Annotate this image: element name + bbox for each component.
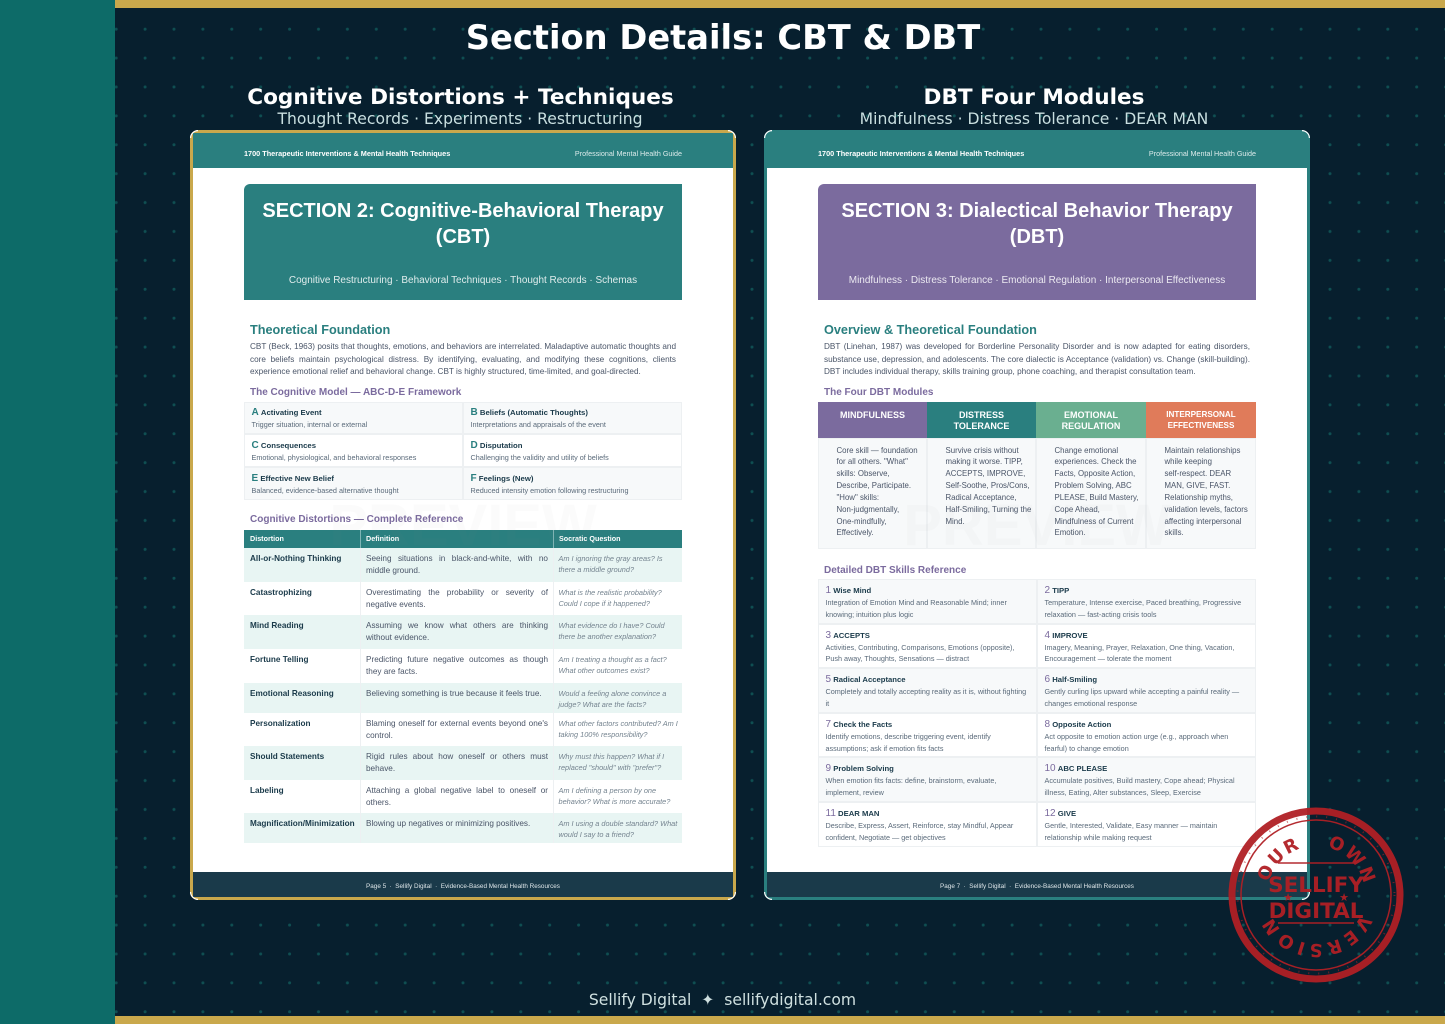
row: personalization: taking 100% responsibility?: [558, 730, 648, 738]
page header bar: [767, 133, 1307, 168]
row: catastrophizing: Overestimating the probability or severity of: [366, 588, 548, 596]
row: emotional reasoning: Emotional Reasoning: [250, 688, 334, 698]
white rounded corners: [190, 130, 736, 900]
module body: emotional regulation: PLEASE, Build Mastery,: [1054, 493, 1138, 502]
page footer: Page 5 · Sellify Digital · Evidence-Based Mental Health Resources: [366, 883, 560, 890]
row: labeling: others.: [366, 798, 391, 807]
row: should statements: Why must this happen? What if I: [558, 752, 664, 760]
skill 5: 5 Radical Acceptance: [826, 674, 906, 685]
module header: distress tolerance: DISTRESS: [959, 410, 1004, 420]
footer credit: Sellify Digital ✦ sellifydigital.com: [589, 991, 856, 1009]
module body: distress tolerance: [927, 438, 1036, 549]
cell B: [463, 402, 682, 434]
row: all-or-nothing: Am I ignoring the gray areas? Is: [558, 554, 663, 562]
cell C: Emotional, physiological, and behavioral responses: [252, 453, 416, 462]
stamp: Sellify Digital our own version: DIGITAL: [1269, 899, 1364, 924]
module body: distress tolerance: Self-Soothe, Pros/Cons,: [946, 481, 1030, 490]
row: emotional reasoning: Believing something is true because it feels true.: [366, 688, 542, 698]
skill 6: changes emotional response: [1044, 699, 1137, 708]
module body: interpersonal effectiveness: while keeping: [1164, 457, 1212, 466]
white rounded corners: [764, 130, 1310, 900]
module header: distress tolerance: [927, 402, 1036, 438]
stamp: Sellify Digital our own version: ★: [1283, 891, 1293, 904]
heading: cognitive model: The Cognitive Model — ABC-D-E Framework: [250, 386, 461, 398]
text block: DBT overview: DBT (Linehan, 1987) was developed for Borderline Personality Disorder and is now adapted for eating disorders,: [824, 342, 1250, 351]
row: emotional reasoning: [244, 683, 682, 713]
bottom gold bar: [115, 1016, 1445, 1024]
skill 1: knowing; intuition plus logic: [826, 610, 913, 619]
panel: DBT document page: [764, 130, 1310, 900]
text block: CBT foundation: [250, 342, 676, 376]
skill 7: [818, 713, 1037, 757]
row: labeling: [250, 780, 670, 813]
module body: emotional regulation: Cope Ahead,: [1054, 505, 1100, 514]
section banner: DBT: (DBT): [1010, 226, 1064, 248]
row: all-or-nothing: All-or-Nothing Thinking: [250, 554, 341, 562]
row: all-or-nothing: there a middle ground?: [558, 564, 634, 574]
stamp: Sellify Digital our own version: VERSION: [1262, 918, 1373, 958]
module body: mindfulness: Effectively.: [836, 528, 874, 537]
cell E: E Effective New Belief: [252, 473, 334, 484]
skill 8: [1037, 713, 1256, 757]
skill 4: 4 IMPROVE: [1044, 630, 1088, 641]
row: magnification: Magnification/Minimization: [250, 818, 355, 828]
cell F: Reduced intensity emotion following restructuring: [470, 486, 628, 495]
row: catastrophizing: negative events.: [366, 600, 426, 609]
heading: cognitive distortions: Cognitive Distortions — Complete Reference: [250, 514, 463, 525]
module body: emotional regulation: experiences. Check the: [1054, 457, 1136, 466]
table header: [244, 530, 682, 548]
row: all-or-nothing: Seeing situations in black-and-white, with no: [366, 554, 548, 562]
cell A: [244, 402, 463, 434]
skill 11: [818, 802, 1037, 847]
row: should statements: Rigid rules about how oneself or others must: [366, 752, 548, 760]
stamp: Sellify Digital our own version: SELLIFY: [1268, 873, 1364, 898]
skill 12: relationship while making request: [1044, 833, 1152, 842]
row: fortune telling: [250, 649, 667, 683]
skill 5: [818, 668, 1037, 713]
module body: distress tolerance: Mind.: [946, 517, 965, 526]
panel: CBT document page: [190, 130, 736, 900]
module body: emotional regulation: Mindfulness of Current: [1054, 517, 1133, 526]
cell D: D Disputation: [470, 440, 522, 451]
row: labeling: Attaching a global negative label to oneself or: [366, 786, 548, 794]
text block: DBT overview: DBT includes individual therapy, skills training group, phone coaching, and therapist consultation team.: [824, 367, 1196, 376]
table header: Definition: [366, 534, 399, 543]
skill 1: Integration of Emotion Mind and Reasonable Mind; inner: [826, 598, 1007, 607]
skill 9: [818, 757, 1037, 802]
skill 10: 10 ABC PLEASE: [1044, 763, 1107, 774]
cell D: [463, 434, 682, 467]
module body: mindfulness: skills: Observe,: [836, 469, 890, 478]
module body: emotional regulation: Problem Solving, ABC: [1054, 481, 1132, 490]
cell B: Interpretations and appraisals of the event: [470, 420, 606, 429]
row: catastrophizing: [250, 582, 662, 615]
skill 7: 7 Check the Facts: [826, 719, 892, 730]
row: fortune telling: What other outcomes exist?: [558, 666, 650, 674]
module header: interpersonal effectiveness: [1146, 402, 1256, 438]
four modules table: [818, 402, 1256, 549]
module body: distress tolerance: making it worse. TIPP,: [946, 457, 1023, 466]
module body: interpersonal effectiveness: MAN, GIVE, FAST.: [1164, 481, 1230, 490]
skill 5: it: [826, 699, 829, 708]
row: personalization: control.: [366, 731, 393, 740]
module header: interpersonal effectiveness: INTERPERSONAL: [1166, 410, 1236, 419]
module body: interpersonal effectiveness: self-respect. DEAR: [1164, 469, 1231, 478]
row: magnification: Am I using a double standard? What: [558, 818, 677, 828]
module body: mindfulness: [818, 438, 927, 549]
module body: emotional regulation: Change emotional: [1054, 446, 1118, 454]
skill 10: illness, Eating, Alter substances, Sleep, Exercise: [1044, 788, 1201, 797]
cell E: Balanced, evidence-based alternative thought: [252, 486, 399, 495]
row: mind reading: What evidence do I have? Could: [558, 620, 665, 630]
skill 11: Describe, Express, Assert, Reinforce, stay Mindful, Appear: [826, 821, 1013, 830]
skill 9: When emotion fits facts: define, brainstorm, evaluate,: [826, 776, 996, 785]
cell E: [244, 467, 463, 500]
row: catastrophizing: What is the realistic probability?: [558, 588, 662, 596]
row: fortune telling: Fortune Telling: [250, 654, 309, 664]
row: fortune telling: Am I treating a thought as a fact?: [558, 654, 667, 664]
module body: interpersonal effectiveness: [1146, 438, 1256, 549]
module body: emotional regulation: [1036, 438, 1146, 549]
skill 9: implement, review: [826, 788, 884, 797]
left teal sidebar: [0, 0, 115, 1024]
skill 3: Push away, Thoughts, Sensations — distract: [826, 654, 969, 663]
cell B: B Beliefs (Automatic Thoughts): [470, 407, 588, 418]
page header bar: Professional Mental Health Guide: [575, 149, 682, 158]
ABC-D-E framework grid: [244, 402, 682, 500]
module header: emotional regulation: [1036, 402, 1146, 438]
page header bar: 1700 Therapeutic Interventions & Mental Health Techniques: [244, 149, 450, 158]
row: should statements: behave.: [366, 764, 395, 773]
text block: CBT foundation: experience emotional relief and behavioral change. CBT is highly structured, time-limited, and goal-directed.: [250, 367, 641, 376]
skill 10: Accumulate positives, Build mastery, Cope ahead; Physical: [1044, 776, 1235, 785]
row: all-or-nothing: middle ground.: [366, 566, 420, 575]
skill 2: relaxation — fast-acting crisis tools: [1044, 610, 1157, 619]
text block: DBT overview: [824, 342, 1250, 376]
cell F: F Feelings (New): [470, 473, 533, 484]
module body: distress tolerance: Survive crisis without: [946, 446, 1019, 454]
left column subheading: Thought Records · Experiments · Restructuring: [277, 110, 642, 128]
skill 1: [818, 579, 1037, 624]
row: should statements: [244, 746, 682, 780]
row: should statements: replaced "should" with "prefer"?: [558, 762, 661, 772]
top gold bar: [115, 0, 1445, 8]
page footer: Page 7 · Sellify Digital · Evidence-Based Mental Health Resources: [940, 883, 1134, 890]
row: labeling: Labeling: [250, 786, 284, 794]
row: mind reading: Mind Reading: [250, 620, 304, 630]
page header bar: [193, 133, 733, 168]
module body: interpersonal effectiveness: Maintain relationships: [1164, 446, 1240, 454]
cell C: C Consequences: [252, 440, 316, 451]
row: emotional reasoning: Would a feeling alone convince a: [558, 688, 666, 698]
section banner: DBT: Mindfulness · Distress Tolerance · Emotional Regulation · Interpersonal Effectiveness: [849, 275, 1225, 286]
section banner: DBT: [818, 184, 1256, 300]
watermark: PREVIEW: [903, 493, 1171, 558]
row: should statements: Should Statements: [250, 752, 324, 760]
skill 8: 8 Opposite Action: [1044, 719, 1111, 730]
skill 11: confident, Negotiate — get objectives: [826, 833, 946, 842]
row: catastrophizing: Could I cope if it happened?: [558, 598, 650, 608]
module body: interpersonal effectiveness: affecting interpersonal: [1164, 517, 1242, 526]
page header bar: Professional Mental Health Guide: [1149, 149, 1256, 158]
skill 12: 12 GIVE: [1044, 808, 1076, 819]
cell A: Trigger situation, internal or external: [252, 420, 367, 429]
skill 12: [1037, 802, 1256, 847]
row: labeling: Am I defining a person by one: [558, 786, 656, 794]
skill 2: [1037, 579, 1256, 624]
skill 3: Activities, Contributing, Comparisons, Emotions (opposite),: [826, 643, 1014, 652]
skill 8: fearful) to change emotion: [1044, 744, 1129, 753]
module body: emotional regulation: Facts, Opposite Action,: [1054, 469, 1135, 478]
text block: CBT foundation: core beliefs maintain psychological distress. By identifying, evaluating, and modifying these cognitions, clients: [250, 355, 676, 364]
skill 6: 6 Half-Smiling: [1044, 674, 1097, 685]
cell A: A Activating Event: [252, 407, 322, 418]
row: mind reading: there be another explanation?: [558, 632, 656, 640]
module body: interpersonal effectiveness: skills.: [1164, 528, 1184, 537]
module header: emotional regulation: EMOTIONAL: [1064, 410, 1118, 420]
module body: mindfulness: for all others. "What": [836, 457, 908, 466]
module header: mindfulness: [818, 402, 927, 438]
module body: emotional regulation: Emotion.: [1054, 528, 1085, 537]
row: personalization: Blaming oneself for external events beyond one's: [366, 718, 548, 728]
row: magnification: [244, 813, 682, 843]
section banner: CBT: SECTION 2: Cognitive-Behavioral Therapy: [262, 200, 664, 222]
heading: skills reference: Detailed DBT Skills Reference: [824, 564, 966, 576]
skill 1: 1 Wise Mind: [826, 585, 871, 596]
row: catastrophizing: Catastrophizing: [250, 588, 312, 596]
page footer: [767, 872, 1307, 897]
table: cognitive distortions: [244, 530, 682, 843]
skill 4: [1037, 624, 1256, 668]
skill 8: Act opposite to emotion action urge (e.g., approach when: [1044, 732, 1228, 741]
row: fortune telling: they are facts.: [366, 667, 417, 676]
title: Section Details: CBT & DBT: [466, 18, 980, 56]
skill 2: Temperature, Intense exercise, Paced breathing, Progressive: [1044, 598, 1241, 607]
row: magnification: would I say to a friend?: [558, 830, 634, 838]
skill 9: 9 Problem Solving: [826, 763, 894, 774]
module body: distress tolerance: Radical Acceptance,: [946, 493, 1017, 502]
module body: distress tolerance: Half-Smiling, Turning the: [946, 505, 1031, 514]
row: all-or-nothing: [244, 548, 682, 582]
skill 10: [1037, 757, 1256, 802]
heading: theoretical foundation: Theoretical Foundation: [250, 323, 390, 337]
right column heading: DBT Four Modules: [924, 85, 1144, 110]
row: emotional reasoning: judge? What are the facts?: [558, 700, 646, 708]
module body: mindfulness: "How" skills:: [836, 493, 879, 502]
row: magnification: Blowing up negatives or minimizing positives.: [366, 818, 530, 828]
heading: four modules: The Four DBT Modules: [824, 386, 933, 398]
text block: CBT foundation: CBT (Beck, 1963) posits that thoughts, emotions, and behaviors are interrelated. Maladaptive automatic thoughts and: [250, 342, 676, 351]
module body: distress tolerance: ACCEPTS, IMPROVE,: [946, 469, 1025, 478]
right column subheading: Mindfulness · Distress Tolerance · DEAR MAN: [860, 110, 1208, 128]
stamp: Sellify Digital our own version: OUR: [1258, 838, 1300, 880]
skill 7: Identify emotions, describe triggering event, identify: [826, 732, 991, 741]
skill 4: Imagery, Meaning, Prayer, Relaxation, One thing, Vacation,: [1044, 643, 1234, 652]
skill 2: 2 TIPP: [1044, 585, 1069, 596]
row: fortune telling: Predicting future negative outcomes as though: [366, 654, 548, 664]
cell C: [244, 434, 463, 467]
stamp: Sellify Digital our own version: ★: [1339, 891, 1349, 904]
heading: overview: Overview & Theoretical Foundation: [824, 323, 1037, 337]
row: personalization: [250, 713, 678, 746]
skill 3: 3 ACCEPTS: [826, 630, 870, 641]
module header: interpersonal effectiveness: EFFECTIVENESS: [1168, 421, 1234, 430]
row: labeling: behavior? What is more accurate?: [558, 796, 670, 806]
row: personalization: What other factors contributed? Am I: [558, 718, 678, 728]
table header: Socratic Question: [559, 534, 621, 543]
gold page frame: [190, 130, 736, 900]
row: mind reading: Assuming we know what others are thinking: [366, 620, 548, 630]
module header: mindfulness: MINDFULNESS: [840, 410, 905, 420]
module header: distress tolerance: TOLERANCE: [954, 421, 1009, 431]
section banner: CBT: (CBT): [436, 226, 490, 248]
skill 5: Completely and totally accepting reality as it is, without fighting: [826, 687, 1026, 696]
section banner: CBT: Cognitive Restructuring · Behavioral Techniques · Thought Records · Schemas: [289, 275, 637, 286]
skill 4: Encouragement — tolerate the moment: [1044, 654, 1171, 663]
skill 11: 11 DEAR MAN: [826, 808, 879, 819]
module body: interpersonal effectiveness: Relationship myths,: [1164, 493, 1233, 502]
skill 7: assumptions; ask if emotion fits facts: [826, 744, 944, 753]
text block: DBT overview: substance use, depression, and adolescents. The core dialectic is Acceptance (validation) vs. Change (skill-building).: [824, 355, 1250, 364]
page header bar: 1700 Therapeutic Interventions & Mental Health Techniques: [818, 149, 1024, 158]
table header: Distortion: [250, 534, 284, 543]
module header: emotional regulation: REGULATION: [1062, 421, 1120, 431]
section banner: DBT: SECTION 3: Dialectical Behavior Therapy: [841, 200, 1233, 222]
stamp: Sellify Digital our own version: OWN: [1330, 836, 1376, 882]
module body: mindfulness: Non-judgmentally,: [836, 505, 899, 514]
skill 6: Gently curling lips upward while accepting a painful reality —: [1044, 687, 1239, 696]
row: mind reading: [244, 615, 682, 649]
cell D: Challenging the validity and utility of beliefs: [470, 453, 609, 462]
left column heading: Cognitive Distortions + Techniques: [247, 85, 674, 110]
watermark: PREVIEW: [329, 493, 597, 558]
module body: interpersonal effectiveness: validation levels, factors: [1164, 505, 1248, 514]
module body: mindfulness: Core skill — foundation: [836, 446, 918, 454]
section banner: CBT: [244, 184, 682, 300]
teal page frame: [764, 130, 1310, 900]
row: mind reading: without evidence.: [366, 633, 429, 642]
cell F: [463, 467, 682, 500]
skill 3: [818, 624, 1037, 668]
skill 6: [1037, 668, 1256, 713]
page footer: [193, 872, 733, 897]
skill 12: Gentle, Interested, Validate, Easy manner — maintain: [1044, 821, 1217, 830]
stamp: Sellify Digital our own version: [1228, 808, 1404, 982]
row: personalization: Personalization: [250, 718, 311, 728]
skills reference grid: [818, 579, 1256, 847]
module body: mindfulness: One-mindfully,: [836, 517, 886, 526]
module body: mindfulness: Describe, Participate.: [836, 481, 911, 490]
